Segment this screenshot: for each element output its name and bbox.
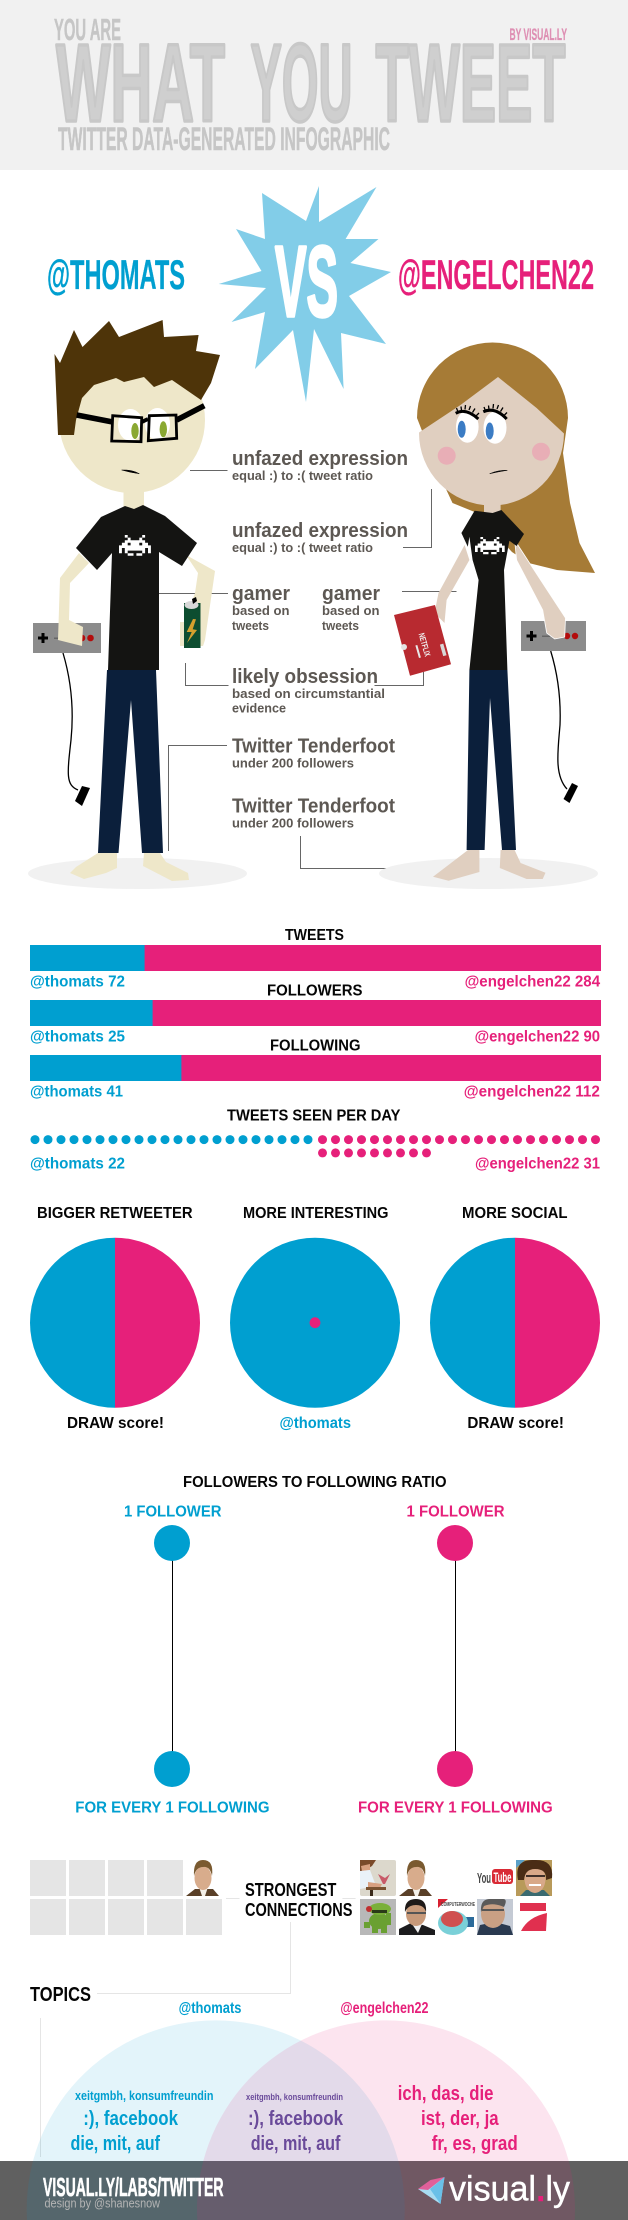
panel: header banner: YOU [250,22,352,145]
bar chart: tweets: @thomats 72 [30,973,125,990]
arms [58,553,215,646]
game controller [33,623,101,653]
pie chart: bigger retweeter: BIGGER RETWEETER [37,1205,193,1222]
callout: gamer (engelchen22): gamer [322,583,380,605]
heading: strongest connections: CONNECTIONS [245,1900,352,1920]
footer branding: VISUAL.LY/LABS/TWITTER [43,2172,224,2202]
callout: unfazed expression (thomats) [232,448,408,483]
bar chart: following [30,1037,601,1100]
eyes and lashes [456,404,507,444]
shadow under engelchen22 [379,858,598,889]
icon: visual.ly kite logo [418,2177,444,2204]
callout: gamer (engelchen22) [322,583,380,633]
trousers [467,670,516,850]
neck [124,488,144,510]
pie chart: more social: DRAW score! [467,1415,564,1432]
venn diagram: topics [27,2000,575,2220]
dot chart: tweets seen per day: TWEETS SEEN PER DAY [227,1107,401,1124]
callout: unfazed expression (engelchen22) [232,520,408,555]
footer branding: design by @shanesnow [44,2196,161,2211]
connections grid: thomats placeholders [30,1860,222,1935]
ratio diagram: engelchen22 [358,1504,553,1817]
red movie envelope: NETFLIX [417,632,433,658]
venn circle: engelchen22 [197,2020,575,2220]
pie chart: bigger retweeter [30,1205,200,1432]
ratio diagram: engelchen22: FOR EVERY 1 FOLLOWING [358,1800,553,1817]
game controller [521,621,586,651]
shared topics: :), facebook [248,2108,344,2130]
avatar: curly haired man [516,1860,552,1896]
bar chart: followers: @engelchen22 90 [475,1028,600,1045]
hair [54,320,220,435]
bar chart: following: @thomats 41 [30,1083,123,1100]
arms [434,540,566,639]
feet [70,853,189,881]
head [59,347,205,493]
callout: unfazed expression (thomats): unfazed expression [232,448,408,470]
space invader [119,535,151,556]
callout: gamer (engelchen22): tweets [322,618,359,633]
callout: gamer (thomats): gamer [232,583,290,605]
callout: twitter tenderfoot (thomats) [232,736,395,771]
shadow under thomats [28,858,247,889]
venn labels: @thomats [179,2000,242,2017]
pie chart: more social [430,1205,600,1432]
avatar: youtube logo: You [477,1870,491,1887]
panel: header banner: BY VISUAL.LY [510,25,567,44]
venn circle: thomats [27,2020,405,2220]
footer branding [43,2170,570,2211]
connector lines to topics [40,1898,356,2157]
panel: header banner: WHAT [56,22,225,145]
thomats topics [70,2089,214,2155]
face [419,377,564,506]
avatar: prosieben logo [520,1903,547,1931]
callout: unfazed expression (engelchen22): equal :) to :( tweet ratio [232,540,373,555]
space invader [475,537,505,554]
thomats topics: :), facebook [83,2108,179,2130]
avatar: man in suit with glasses [399,1899,435,1935]
callout: gamer (thomats): tweets [232,618,269,633]
cable and plug [551,651,578,803]
avatar: man portrait [399,1860,432,1896]
ratio diagram: thomats: 1 FOLLOWER [124,1504,222,1521]
callout: gamer (engelchen22): based on [322,603,380,618]
footer band [0,2161,628,2220]
engelchen22 topics: ich, das, die [398,2083,493,2105]
heading: @thomats: @THOMATS [47,251,185,298]
shared topics: xeitgmbh, konsumfreundin [246,2092,343,2102]
callout: gamer (thomats): based on [232,603,290,618]
bar chart: followers [30,982,601,1045]
thomats topics: die, mit, auf [70,2133,160,2155]
bar chart: following: FOLLOWING [270,1037,360,1054]
ratio diagram: engelchen22: 1 FOLLOWER [406,1504,505,1521]
panel: header banner: YOU ARE [54,12,121,47]
engelchen22 dots [318,1135,600,1157]
callout: twitter tenderfoot (engelchen22): under 200 followers [232,816,354,831]
callout: unfazed expression (thomats): equal :) to :( tweet ratio [232,468,373,483]
callout: twitter tenderfoot (thomats): under 200 followers [232,756,354,771]
callout: unfazed expression (engelchen22): unfazed expression [232,520,408,542]
engelchen22 topics: ist, der, ja [421,2108,499,2130]
red movie envelope [394,605,451,676]
avatar: man portrait (thomats) [186,1860,219,1896]
ratio diagram: thomats [75,1504,270,1817]
engelchen22 topics: fr, es, grad [432,2133,518,2155]
pie chart: more social: MORE SOCIAL [462,1205,568,1222]
leader lines for the callouts [159,470,456,868]
bar chart: followers: @thomats 25 [30,1028,125,1045]
callout: gamer (thomats) [232,583,290,633]
heading: strongest connections [245,1880,352,1920]
callout: likely obsession: based on circumstantial [232,686,385,701]
mouth [490,470,507,474]
dot chart: tweets seen per day: @thomats 22 [30,1156,125,1173]
thomats dots [30,1135,312,1144]
neck [484,486,501,513]
avatar: man with grey hair [477,1899,513,1935]
icon: VS starburst [219,186,391,402]
feet [433,850,546,881]
t-shirt [461,510,524,670]
callout: twitter tenderfoot (engelchen22) [232,796,395,831]
dot chart: tweets seen per day: @engelchen22 31 [475,1156,600,1173]
heading: strongest connections: STRONGEST [245,1880,336,1900]
cheeks [438,443,550,465]
t-shirt [76,505,197,670]
callout: likely obsession [232,666,385,716]
callout: twitter tenderfoot (engelchen22): Twitter Tenderfoot [232,796,395,818]
pie chart: bigger retweeter: DRAW score! [67,1415,164,1432]
eyes [118,408,170,441]
dot chart: tweets seen per day [30,1107,600,1173]
avatar: computerwoche brain: COMPUTERWOCHE [441,1902,475,1908]
thomats topics: xeitgmbh, konsumfreundin [75,2089,214,2103]
ratio diagram: thomats: FOR EVERY 1 FOLLOWING [75,1800,270,1817]
bar chart: tweets: @engelchen22 284 [465,973,600,990]
bar chart: following: @engelchen22 112 [464,1083,600,1100]
heading: followers to following ratio: FOLLOWERS TO FOLLOWING RATIO [183,1474,446,1491]
bar chart: followers: FOLLOWERS [267,982,362,999]
heading: topics: TOPICS [30,1984,91,2006]
venn labels [179,2000,429,2017]
footer branding: visual.ly [449,2170,570,2209]
panel: header banner [0,0,628,170]
figure: thomats character [28,320,247,889]
avatar: android mascot [360,1899,396,1935]
pie chart: more interesting: MORE INTERESTING [243,1205,388,1222]
callout: likely obsession: likely obsession [232,666,378,688]
callout: likely obsession: evidence [232,701,286,716]
venn labels: @engelchen22 [340,2000,429,2017]
figure: engelchen22 character [379,342,598,889]
glasses [77,406,204,442]
pie chart: more interesting [230,1205,400,1432]
long hair [417,342,595,573]
bar chart: tweets [30,927,601,990]
trousers [98,670,163,853]
energy drink can [184,597,200,648]
bar chart: tweets: TWEETS [285,927,344,944]
pie chart: more interesting: @thomats [280,1415,351,1432]
mouth [122,470,139,474]
shared topics: die, mit, auf [251,2133,341,2155]
avatar: illustrated person with chair [360,1860,396,1896]
shared topics [246,2092,344,2155]
icon: VS starburst: VS [275,226,338,338]
avatar: youtube logo: Tube [494,1869,512,1885]
cable and plug [63,653,90,806]
engelchen22 topics [398,2083,518,2155]
callout: twitter tenderfoot (thomats): Twitter Tenderfoot [232,736,395,758]
avatar: computerwoche brain [438,1899,475,1935]
